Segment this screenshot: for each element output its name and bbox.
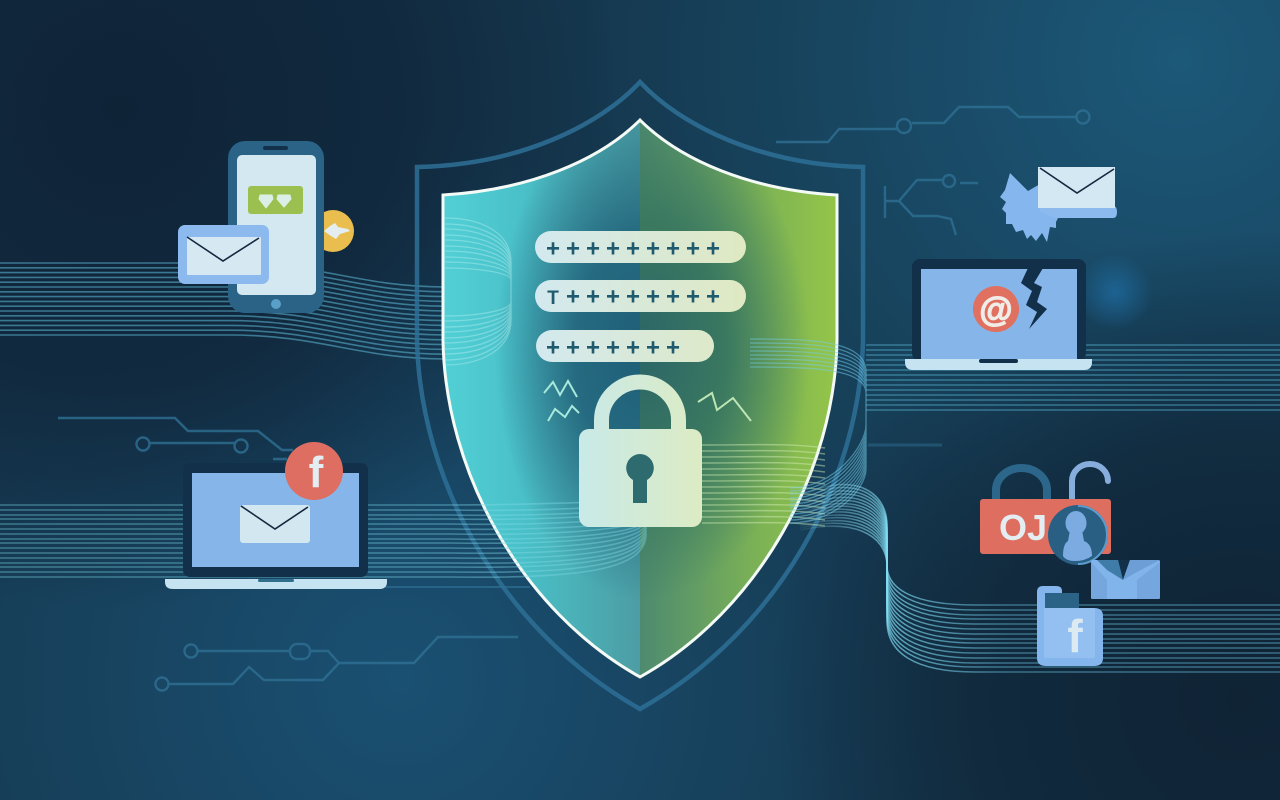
- padlock: [579, 382, 702, 527]
- folder: f: [1067, 610, 1083, 662]
- yellow badge: [312, 210, 354, 252]
- password field 2: ++++++++: [566, 283, 720, 310]
- icon: mail with burst: [1000, 167, 1117, 242]
- lock label: OJ: [999, 507, 1047, 548]
- phone screen: [237, 155, 316, 295]
- f badge: f: [309, 448, 324, 497]
- open shackle: [1072, 464, 1108, 499]
- password fields: [535, 231, 746, 362]
- circuit traces: [58, 107, 1090, 690]
- shield right half: [640, 120, 837, 680]
- mail envelope: [178, 225, 269, 284]
- f badge: [285, 442, 343, 500]
- phone speaker: [263, 146, 288, 150]
- password field 1: [535, 231, 746, 263]
- shield border: [443, 120, 837, 677]
- icon: laptop with mail and f badge: [165, 442, 387, 589]
- phone body: [228, 141, 324, 313]
- mail envelope: [240, 505, 310, 543]
- password field 1: +++++++++: [546, 235, 720, 262]
- laptop screen: [921, 269, 1077, 359]
- data stream: lower left into shield: [0, 501, 646, 577]
- laptop base: [165, 579, 387, 589]
- data stream coil inside shield: [445, 218, 511, 365]
- laptop lid: [183, 463, 368, 577]
- laptop base: [905, 359, 1092, 370]
- password field 3: [536, 330, 714, 362]
- at sign badge: @: [979, 291, 1013, 329]
- password field 2: [535, 280, 746, 312]
- small envelope: [1091, 560, 1160, 599]
- laptop lid: [912, 259, 1086, 361]
- folder: [1037, 586, 1103, 666]
- data stream: fan to lower right: [800, 484, 1280, 672]
- icon: locks, profile, mail and folder: [980, 464, 1160, 666]
- shield: [443, 120, 837, 680]
- data stream right of lock: [702, 445, 825, 526]
- profile badge: [1048, 505, 1108, 565]
- icon: phone with message and mail: [178, 141, 354, 313]
- at sign badge: [973, 286, 1019, 332]
- data stream: upper left: [0, 263, 445, 359]
- outer shield outline: [417, 82, 863, 709]
- red lock body: [980, 499, 1111, 554]
- password field 2: T: [547, 288, 559, 309]
- laptop screen: [192, 473, 359, 567]
- keyhole: [626, 454, 654, 503]
- phone home button: [271, 299, 281, 309]
- data stream coil on the right shield edge: [750, 339, 866, 523]
- data stream: right horizontal: [866, 345, 1280, 410]
- icon: broken laptop with at sign: [905, 259, 1092, 370]
- shield left half: [443, 120, 640, 680]
- zigzag sparks: [544, 381, 751, 421]
- envelope: [1038, 167, 1117, 218]
- burst: [1000, 173, 1058, 242]
- message bubble: [248, 186, 303, 214]
- closed shackle: [996, 468, 1047, 500]
- password field 3: +++++++: [546, 334, 680, 361]
- screen crack: [1021, 268, 1047, 329]
